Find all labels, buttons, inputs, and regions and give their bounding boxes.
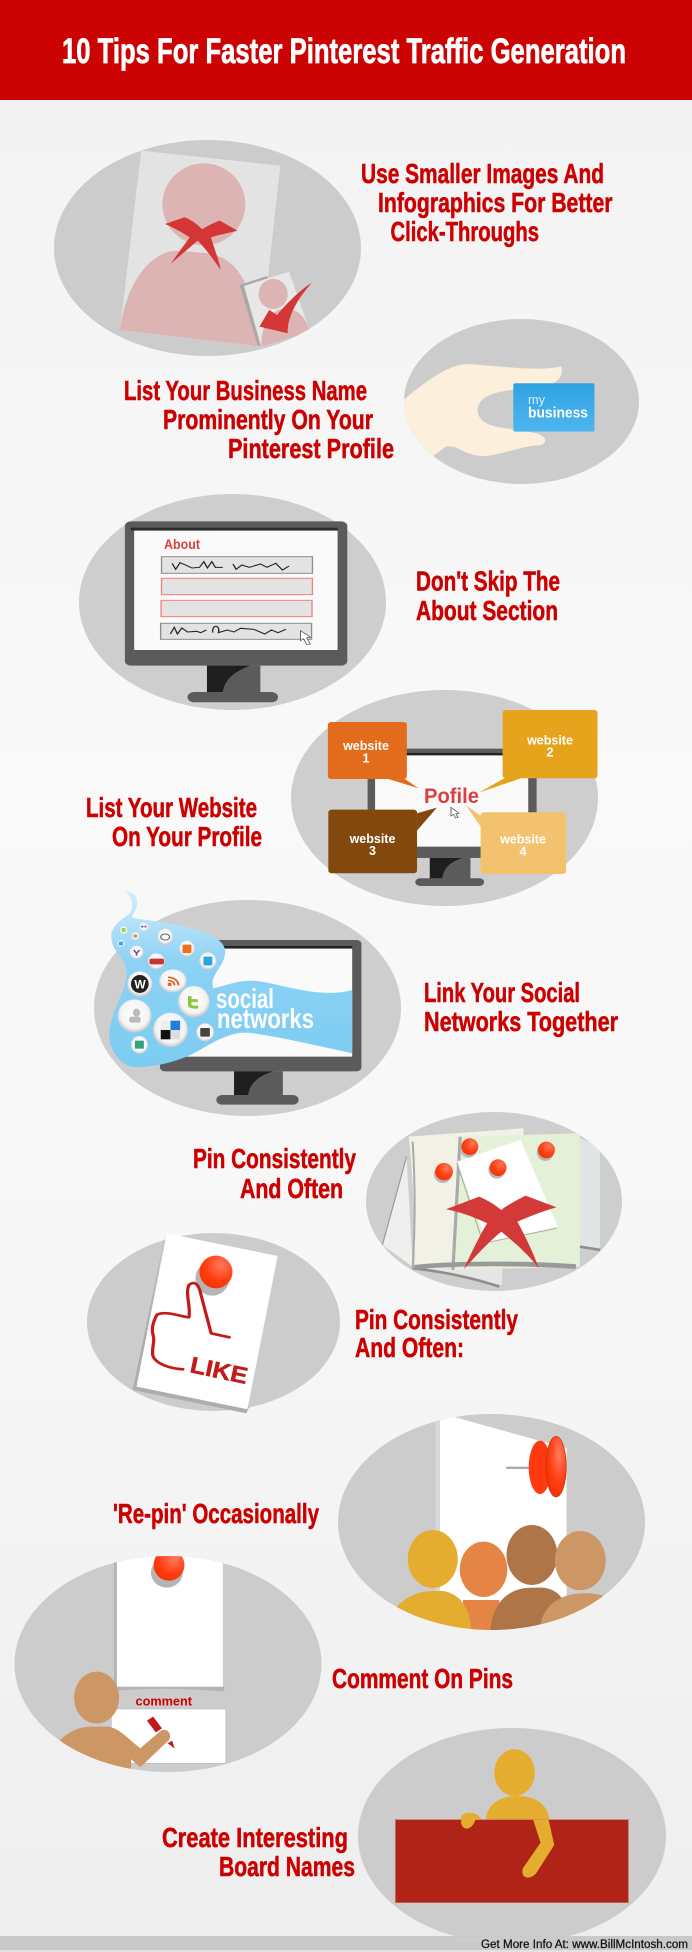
heading: Comment On Pins [332, 1663, 513, 1694]
icon: hand holding business card [399, 364, 594, 457]
heading: Pin Consistently [193, 1143, 356, 1174]
icon: monitor with social network bubbles [109, 891, 361, 1105]
heading: 'Re-pin' Occasionally [113, 1498, 319, 1529]
icon: pin on paper with group of people [396, 1417, 606, 1630]
heading: Prominently On Your [163, 404, 373, 435]
panel: tip 5 social networks [94, 891, 618, 1116]
heading: Create Interesting [162, 1822, 348, 1853]
heading: Don't Skip The [416, 566, 560, 597]
icon: monitor with social network bubbles: W [134, 978, 146, 992]
icon: monitor with website speech bubbles: 1 [363, 752, 370, 766]
icon: monitor with about form [125, 521, 347, 702]
header banner [0, 0, 692, 100]
panel: tip 1 smaller images [54, 140, 613, 356]
heading: On Your Profile [112, 821, 262, 852]
icon: pinned note with thumbs up: LIKE [188, 1351, 250, 1389]
heading: List Your Business Name [124, 375, 367, 406]
icon: monitor with website speech bubbles: 3 [369, 844, 376, 858]
icon: monitor with about form: About [164, 536, 200, 552]
panel: tip 9 comment [14, 1549, 513, 1773]
icon: monitor with website speech bubbles: website [342, 739, 389, 753]
illustration: large and small profile images [120, 151, 312, 347]
panel: tip 3 about section [79, 494, 560, 710]
icon: monitor with website speech bubbles [328, 710, 598, 886]
panel: tip 2 business name [124, 319, 639, 484]
heading: List Your Website [86, 792, 257, 823]
heading: And Often: [355, 1332, 464, 1363]
icon: monitor with website speech bubbles: website [499, 833, 546, 847]
panel: tip 10 board names [162, 1728, 666, 1944]
heading: Use Smaller Images And [361, 158, 604, 189]
icon: hand holding business card: my [528, 393, 546, 407]
heading [162, 1822, 355, 1882]
heading [355, 1304, 518, 1363]
heading: About Section [416, 595, 558, 626]
heading: Infographics For Better [378, 187, 613, 218]
icon: pinned papers with red cross [382, 1128, 600, 1287]
icon: person writing a comment under a pin: comment [136, 1694, 193, 1709]
heading [361, 158, 613, 247]
heading [193, 1143, 356, 1204]
heading [424, 977, 618, 1037]
panel: tip 8 re-pin [113, 1413, 645, 1633]
heading: Click-Throughs [390, 216, 539, 247]
icon: person holding a red board [395, 1749, 628, 1903]
panel: tip 6 pin consistently [193, 1112, 622, 1291]
source credit: Get More Info At: www.BillMcIntosh.com [481, 1939, 688, 1951]
icon: monitor with website speech bubbles: website [526, 733, 573, 747]
icon: hand holding business card: business [528, 406, 588, 422]
heading [86, 792, 262, 852]
icon: pinned note with thumbs up [133, 1233, 278, 1413]
heading [416, 566, 560, 626]
icon: person writing a comment under a pin [57, 1549, 226, 1773]
icon: monitor with website speech bubbles: Pofile [424, 785, 479, 808]
heading: And Often [240, 1173, 343, 1204]
icon: monitor with website speech bubbles: 4 [520, 845, 527, 859]
heading: Pinterest Profile [228, 433, 394, 464]
heading [124, 375, 394, 464]
icon: monitor with website speech bubbles: 2 [547, 746, 554, 760]
icon: monitor with social network bubbles: networks [217, 1003, 314, 1034]
icon: monitor with social network bubbles: social [216, 983, 274, 1014]
heading: Board Names [219, 1851, 355, 1882]
footer bar [0, 1936, 692, 1952]
panel: tip 4 website on profile [86, 690, 598, 906]
icon: monitor with website speech bubbles: website [349, 832, 395, 846]
panel: tip 7 like [87, 1233, 518, 1413]
heading: Networks Together [424, 1006, 618, 1037]
heading: Link Your Social [424, 977, 580, 1008]
heading: Pin Consistently [355, 1304, 518, 1335]
